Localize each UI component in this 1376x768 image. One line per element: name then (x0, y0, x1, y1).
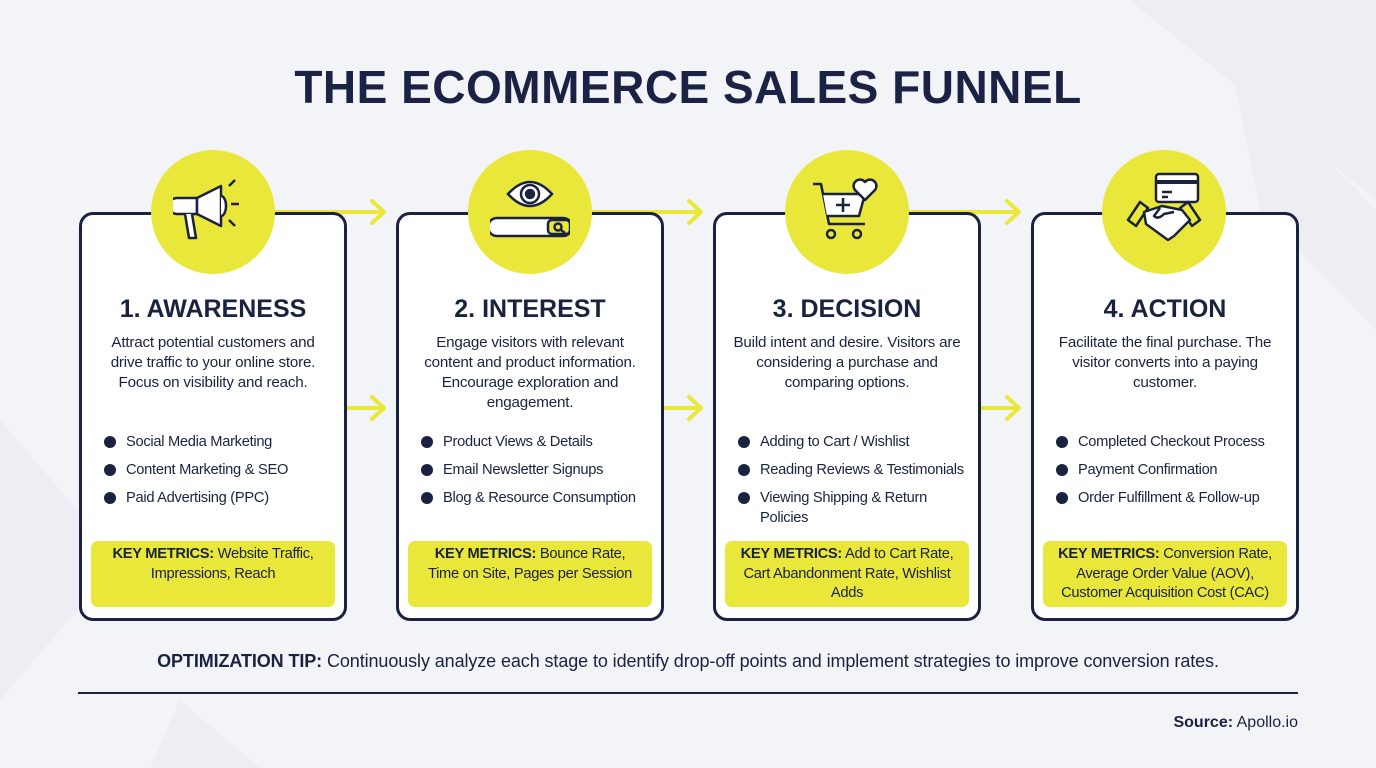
panel: decision: Build intent and desire. Visitors are considering a purchase and comparing options. (733, 334, 960, 391)
panel: awareness: Content Marketing & SEO (126, 462, 288, 478)
panel: decision: Adding to Cart / Wishlist (760, 434, 909, 450)
panel: decision: KEY METRICS: Add to Cart Rate, Cart Abandonment Rate, Wishlist Adds (741, 546, 953, 601)
panel: action: Facilitate the final purchase. The visitor converts into a paying customer. (1059, 334, 1271, 391)
source: Source: Apollo.io (1173, 714, 1298, 731)
icon: megaphone (151, 150, 275, 274)
panel: action (1031, 212, 1299, 621)
panel: action: Order Fulfillment & Follow-up (1078, 490, 1259, 506)
title: THE ECOMMERCE SALES FUNNEL (294, 61, 1082, 113)
panel: awareness: Attract potential customers and drive traffic to your online store. Focus on visibility and reach. (111, 334, 315, 391)
panel: action: KEY METRICS: Conversion Rate, Average Order Value (AOV), Customer Acquisition Cost (CAC) (1058, 546, 1272, 601)
panel: awareness: 1. AWARENESS (120, 295, 306, 323)
panel: interest: Engage visitors with relevant content and product information. Encourage exploration and engagement. (424, 334, 636, 411)
panel: action: 4. ACTION (1104, 295, 1226, 323)
panel: decision: 3. DECISION (773, 295, 921, 323)
panel: interest: Blog & Resource Consumption (443, 490, 636, 506)
icon: eye search (468, 150, 592, 274)
panel: action: Payment Confirmation (1078, 462, 1217, 478)
panel: decision: Reading Reviews & Testimonials (760, 462, 964, 478)
icon: handshake card (1102, 150, 1226, 274)
panel: awareness: Social Media Marketing (126, 434, 272, 450)
panel: awareness: KEY METRICS: Website Traffic, Impressions, Reach (112, 546, 314, 582)
panel: interest: Product Views & Details (443, 434, 593, 450)
panel: awareness (79, 212, 347, 621)
panel: interest: Email Newsletter Signups (443, 462, 603, 478)
panel: interest (396, 212, 664, 621)
panel: awareness: Paid Advertising (PPC) (126, 490, 269, 506)
icon: cart heart (785, 150, 909, 274)
panel: decision: Viewing Shipping & Return Policies (760, 490, 927, 526)
panel: action: Completed Checkout Process (1078, 434, 1264, 450)
optimization tip: OPTIMIZATION TIP: Continuously analyze each stage to identify drop-off points and implement strategies to improve conversion rates. (157, 651, 1219, 671)
panel: interest: 2. INTEREST (454, 295, 606, 323)
panel: interest: KEY METRICS: Bounce Rate, Time on Site, Pages per Session (428, 546, 632, 582)
panel: decision (713, 212, 981, 621)
